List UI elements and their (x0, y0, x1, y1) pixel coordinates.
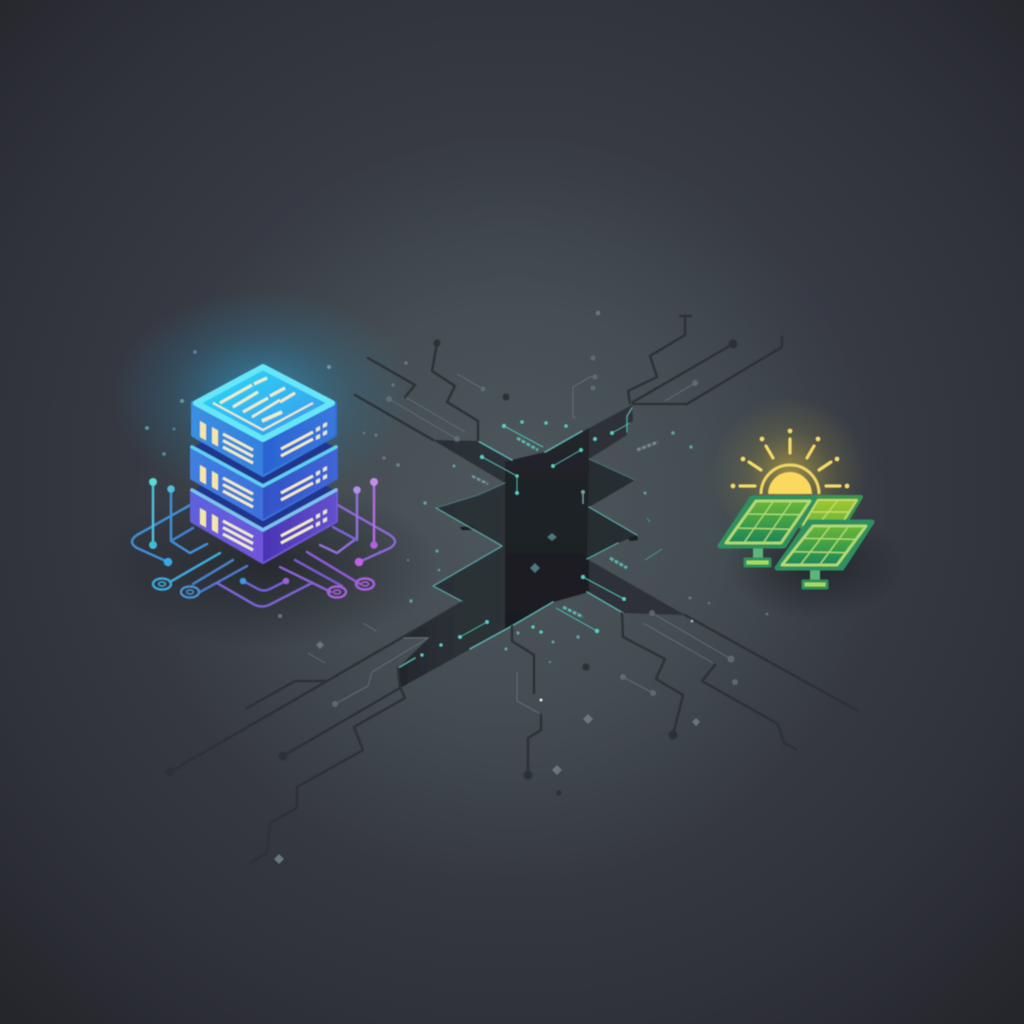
faint grey circuit lines (308, 356, 738, 713)
scattered particles (145, 311, 768, 864)
dark crack traces (167, 316, 858, 863)
floor disc (137, 135, 887, 885)
lower left traces (167, 602, 463, 863)
sun (731, 429, 849, 494)
server circuit: purple right traces (280, 478, 395, 598)
server tier 3 (192, 452, 336, 562)
crack centre shaft (505, 428, 589, 630)
rear solar panel (801, 497, 861, 527)
crack lit edges (398, 408, 637, 668)
sun rays (731, 429, 849, 488)
lower right traces (512, 613, 858, 794)
crack void (398, 405, 685, 688)
data server stack (132, 367, 395, 606)
crack shadow right wall (587, 459, 637, 559)
front left solar panel (720, 498, 814, 566)
solar array (720, 429, 872, 588)
server tier 1 (193, 367, 335, 475)
server top document lines (213, 378, 313, 430)
central crack (398, 405, 685, 688)
upper left traces (355, 341, 508, 441)
server tier 2 (192, 409, 336, 519)
blue glow behind server (112, 290, 412, 500)
crack rubble marks (460, 526, 638, 541)
yellow glow behind sun (712, 397, 868, 553)
shadow under server (100, 480, 440, 650)
shadow under solar panels (725, 510, 905, 620)
server circuit: blue left traces (132, 478, 312, 606)
front right solar panel (777, 522, 872, 588)
upper right traces (628, 316, 782, 404)
teal data links (396, 420, 693, 663)
